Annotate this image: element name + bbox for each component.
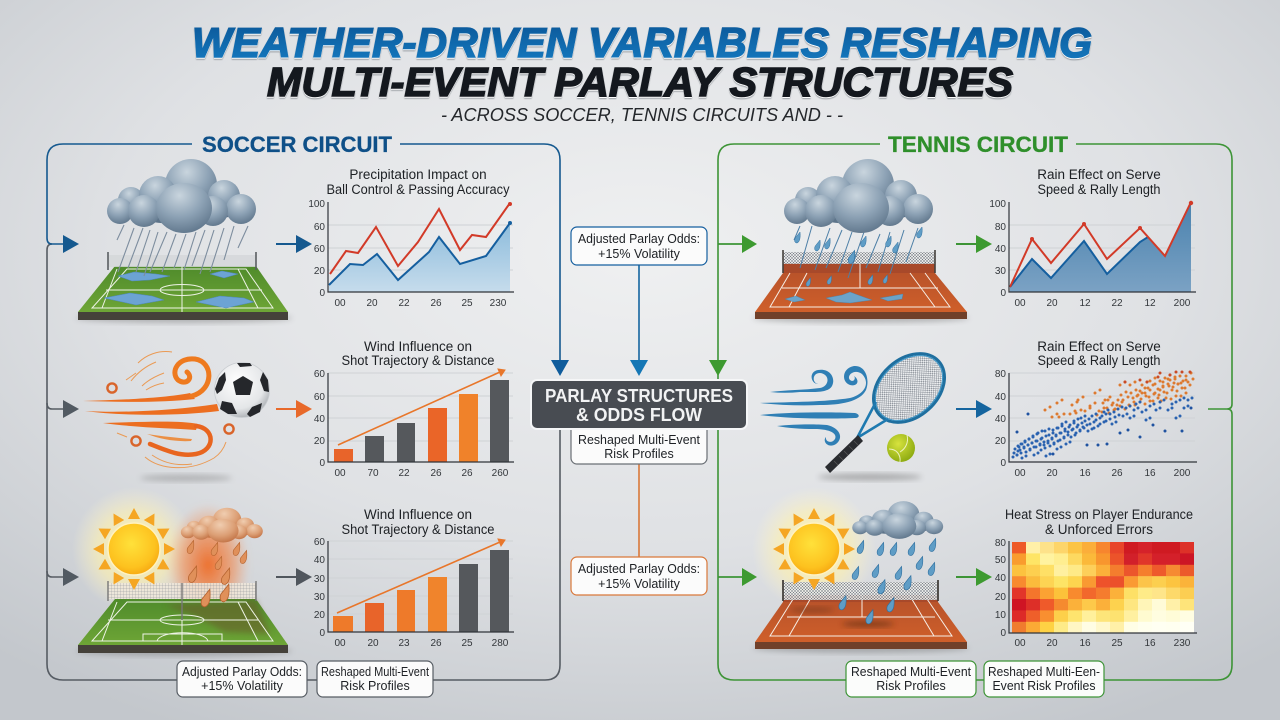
chart: heat stress heatmap: 80 <box>995 538 1006 549</box>
illustration: rain over clay court <box>753 159 969 323</box>
chart: precipitation impact soccer: 60 <box>314 244 325 255</box>
chart: wind influence soccer: 0 <box>319 458 325 469</box>
chart: rain effect tennis: 12 <box>1079 298 1091 309</box>
callout: soccer reshaped profiles: Reshaped Multi-Event <box>321 665 429 679</box>
chart: heat stress heatmap: 230 <box>1174 638 1191 649</box>
chart: precipitation impact soccer: 0 <box>319 288 325 299</box>
arrow: soccer into parlay box <box>551 360 569 376</box>
callout: centre adjusted odds orange: Adjusted Parlay Odds: <box>578 562 700 576</box>
chart: rain effect tennis: 40 <box>995 244 1006 255</box>
panel: parlay structures and odds flow <box>531 380 747 429</box>
chart: heat stress heatmap <box>995 507 1197 649</box>
chart: scatter rain effect tennis: 0 <box>1000 458 1006 469</box>
chart: scatter rain effect tennis: 200 <box>1174 468 1191 479</box>
chart: precipitation impact soccer: 60 <box>314 222 325 233</box>
chart: heat stress heatmap: 50 <box>995 555 1006 566</box>
illustration: wind and soccer ball <box>83 352 270 482</box>
chart: wind influence soccer second: 25 <box>461 638 473 649</box>
chart: wind influence soccer: 70 <box>367 468 379 479</box>
chart: scatter rain effect tennis: 80 <box>995 369 1006 380</box>
callout: centre adjusted odds orange <box>571 557 707 595</box>
arrow: soccer chart 1 <box>276 235 312 253</box>
title <box>192 19 1092 105</box>
chart: wind influence soccer second: Wind Influence on <box>364 507 472 522</box>
chart: wind influence soccer: 60 <box>314 392 325 403</box>
arrow: tennis into parlay box <box>709 360 727 376</box>
chart: rain effect tennis: 22 <box>1111 298 1123 309</box>
chart: precipitation impact soccer: 26 <box>430 298 442 309</box>
chart: scatter rain effect tennis <box>995 339 1197 479</box>
chart: rain effect tennis: 00 <box>1014 298 1026 309</box>
chart: heat stress heatmap: 16 <box>1079 638 1091 649</box>
chart: rain effect tennis: 200 <box>1174 298 1191 309</box>
arrow: tennis chart 3 <box>956 568 992 586</box>
chart: rain effect tennis: 12 <box>1144 298 1156 309</box>
callout: soccer reshaped profiles <box>317 661 433 697</box>
arrow: centre into parlay box <box>630 360 648 376</box>
chart: precipitation impact soccer: 00 <box>334 298 346 309</box>
chart: heat stress heatmap: 10 <box>995 610 1006 621</box>
chart: heat stress heatmap: 40 <box>995 573 1006 584</box>
chart: wind influence soccer second: 30 <box>314 574 325 585</box>
chart: wind influence soccer second: 23 <box>398 638 410 649</box>
chart: rain effect tennis: Speed & Rally Length <box>1038 182 1160 197</box>
chart: precipitation impact soccer <box>308 167 514 309</box>
chart: rain effect tennis: Rain Effect on Serve <box>1037 167 1161 182</box>
callout: centre reshaped profiles: Reshaped Multi-Event <box>578 433 701 447</box>
chart: wind influence soccer second: 00 <box>334 638 346 649</box>
chart: scatter rain effect tennis: 20 <box>995 436 1006 447</box>
chart: scatter rain effect tennis: 26 <box>1111 468 1123 479</box>
callout: tennis reshaped profiles one: Risk Profiles <box>876 679 946 693</box>
chart: rain effect tennis: 100 <box>989 199 1006 210</box>
arrow: tennis chart 1 <box>956 235 992 253</box>
arrow: tennis row 3 in <box>718 568 757 586</box>
panel: parlay structures and odds flow: & ODDS FLOW <box>576 404 703 425</box>
centre connectors <box>638 265 640 557</box>
callout: centre reshaped profiles <box>571 420 707 464</box>
heading: tennis circuit: TENNIS CIRCUIT <box>888 132 1069 157</box>
chart: wind influence soccer second: Shot Trajectory & Distance <box>342 522 494 537</box>
callout: soccer reshaped profiles: Risk Profiles <box>340 679 410 693</box>
chart: wind influence soccer second: 30 <box>314 592 325 603</box>
chart: rain effect tennis: 0 <box>1000 288 1006 299</box>
callout: centre adjusted odds blue: +15% Volatility <box>598 247 681 261</box>
chart: precipitation impact soccer: Precipitation Impact on <box>349 167 487 182</box>
chart: heat stress heatmap: & Unforced Errors <box>1045 522 1153 537</box>
callout: centre adjusted odds blue <box>571 227 707 265</box>
title: WEATHER-DRIVEN VARIABLES RESHAPING <box>192 19 1092 66</box>
chart: heat stress heatmap: Heat Stress on Player Endurance <box>1005 507 1193 522</box>
chart: precipitation impact soccer: 20 <box>366 298 378 309</box>
chart: wind influence soccer: Wind Influence on <box>364 339 472 354</box>
chart: scatter rain effect tennis: 16 <box>1144 468 1156 479</box>
callout: tennis reshaped profiles one <box>846 661 976 697</box>
chart: wind influence soccer: 22 <box>398 468 410 479</box>
arrow: soccer row 3 in <box>47 568 79 586</box>
callout: tennis reshaped profiles two: Event Risk Profiles <box>992 679 1096 693</box>
chart: rain effect tennis: 80 <box>995 222 1006 233</box>
chart: precipitation impact soccer: 25 <box>461 298 473 309</box>
chart: wind influence soccer second: 280 <box>492 638 509 649</box>
chart: rain effect tennis: 20 <box>1046 298 1058 309</box>
chart: wind influence soccer: 40 <box>314 414 325 425</box>
chart: wind influence soccer second: 40 <box>314 555 325 566</box>
title: MULTI-EVENT PARLAY STRUCTURES <box>267 59 1013 105</box>
chart: wind influence soccer second: 20 <box>367 638 379 649</box>
chart: scatter rain effect tennis: 40 <box>995 392 1006 403</box>
chart: wind influence soccer: Shot Trajectory & Distance <box>342 353 494 368</box>
chart: precipitation impact soccer: 230 <box>490 298 507 309</box>
arrow: soccer row 2 in <box>47 400 79 418</box>
chart: rain effect tennis: 30 <box>995 266 1006 277</box>
arrow: soccer row 1 in <box>47 235 79 253</box>
chart: wind influence soccer second: 20 <box>314 610 325 621</box>
arrow: soccer chart 3 <box>276 568 312 586</box>
heading: soccer circuit: SOCCER CIRCUIT <box>202 132 393 157</box>
chart: heat stress heatmap: 16 <box>1144 638 1156 649</box>
callout: soccer adjusted odds: Adjusted Parlay Odds: <box>182 665 302 679</box>
chart: wind influence soccer: 20 <box>314 436 325 447</box>
illustration: sun and storm over soccer pitch <box>72 487 292 656</box>
chart: rain effect tennis <box>989 167 1196 309</box>
chart: wind influence soccer second: 60 <box>314 537 325 548</box>
chart: precipitation impact soccer: 22 <box>398 298 410 309</box>
chart: precipitation impact soccer: 100 <box>308 199 325 210</box>
soccer circuit frame <box>47 144 560 680</box>
chart: wind influence soccer: 00 <box>334 468 346 479</box>
chart: wind influence soccer: 26 <box>430 468 442 479</box>
subtitle: - ACROSS SOCCER, TENNIS CIRCUITS AND - - <box>441 105 843 125</box>
chart: heat stress heatmap: 25 <box>1111 638 1123 649</box>
chart: wind influence soccer: 60 <box>314 369 325 380</box>
arrow: tennis row 1 in <box>718 235 757 253</box>
chart: scatter rain effect tennis: 40 <box>995 414 1006 425</box>
chart: wind influence soccer: 26 <box>461 468 473 479</box>
callout: tennis reshaped profiles two: Reshaped Multi-Een- <box>988 665 1100 679</box>
illustration: wind and tennis racket <box>760 340 958 480</box>
chart: scatter rain effect tennis: 16 <box>1079 468 1091 479</box>
callout: centre reshaped profiles: Risk Profiles <box>604 447 674 461</box>
chart: wind influence soccer second: 26 <box>430 638 442 649</box>
chart: wind influence soccer second <box>314 507 514 649</box>
illustration: rain over soccer pitch <box>76 159 292 323</box>
chart: wind influence soccer second: 0 <box>319 628 325 639</box>
arrow: soccer chart 2 <box>276 400 312 418</box>
chart: precipitation impact soccer: 20 <box>314 266 325 277</box>
callout: centre adjusted odds blue: Adjusted Parlay Odds: <box>578 232 700 246</box>
tennis circuit frame <box>718 144 1232 680</box>
chart: precipitation impact soccer: Ball Control & Passing Accuracy <box>326 182 510 197</box>
chart: heat stress heatmap: 20 <box>1046 638 1058 649</box>
chart: heat stress heatmap: 0 <box>1000 628 1006 639</box>
callout: tennis reshaped profiles two <box>984 661 1104 697</box>
chart: heat stress heatmap: 00 <box>1014 638 1026 649</box>
chart: scatter rain effect tennis: Rain Effect on Serve <box>1037 339 1161 354</box>
callout: soccer adjusted odds <box>177 661 307 697</box>
chart: scatter rain effect tennis: 00 <box>1014 468 1026 479</box>
callout: centre adjusted odds orange: +15% Volatility <box>598 577 681 591</box>
panel: parlay structures and odds flow: PARLAY STRUCTURES <box>545 385 733 406</box>
chart: scatter rain effect tennis: Speed & Rally Length <box>1038 353 1160 368</box>
callout: tennis reshaped profiles one: Reshaped Multi-Event <box>851 665 972 679</box>
chart: scatter rain effect tennis: 20 <box>1046 468 1058 479</box>
illustration: sun and rain over clay court <box>752 487 969 653</box>
chart: wind influence soccer <box>314 339 514 479</box>
arrow: tennis chart 2 <box>956 400 992 418</box>
callout: soccer adjusted odds: +15% Volatility <box>201 679 284 693</box>
chart: wind influence soccer: 260 <box>492 468 509 479</box>
chart: heat stress heatmap: 20 <box>995 592 1006 603</box>
